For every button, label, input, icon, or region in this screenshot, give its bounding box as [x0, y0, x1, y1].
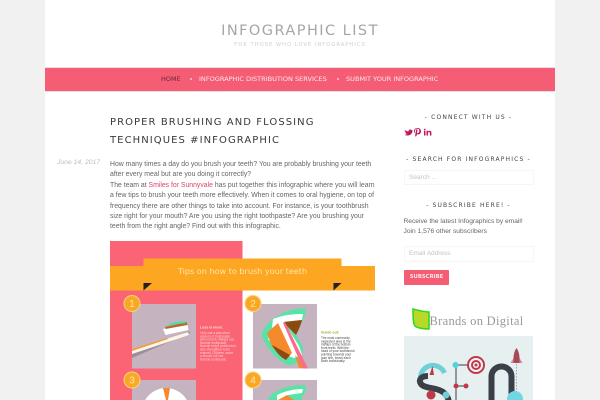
step 1 text: fluoride toothpaste. — [200, 357, 227, 361]
post body text: teeth from the right angle? Find out with this infographic. — [110, 223, 281, 230]
step 1 text: also strengthen tooth — [200, 348, 230, 352]
step 1 text: when brush. Always use — [200, 338, 234, 342]
site title: INFOGRAPHIC LIST — [221, 22, 379, 38]
gauge needle — [430, 366, 434, 375]
rocket — [510, 348, 522, 363]
step 1 image — [132, 304, 196, 368]
navigation bar — [45, 67, 555, 92]
step 4 number badge — [245, 372, 261, 388]
email input: Email Address — [409, 250, 451, 256]
social icons — [404, 128, 432, 137]
ribbon back — [110, 266, 375, 290]
step 1 text: a should not use — [200, 354, 224, 358]
post body text: frequency there are other things to take into account. For instance, is your toothbrush — [110, 203, 369, 210]
step 1 text: fluoride helps protect and — [200, 344, 236, 348]
post title: PROPER BRUSHING AND FLOSSING — [110, 117, 315, 128]
step 2 text: insides of the bottom — [321, 343, 351, 347]
letter S — [420, 376, 449, 400]
gauge — [420, 365, 444, 377]
gear — [426, 390, 436, 400]
post date: June 14, 2017 — [57, 159, 100, 166]
nav: home: HOME — [161, 75, 181, 83]
step 1 text: Less is more: — [200, 326, 223, 330]
step 1 text: enamel. Children under — [200, 351, 234, 355]
post body text — [110, 160, 375, 230]
step 4 number badge: 4 — [250, 376, 256, 386]
step 2 text: neglected area is the — [321, 339, 351, 343]
step 4 image — [253, 380, 317, 400]
subscribe button: SUBSCRIBE — [410, 274, 443, 280]
search input: Search ... — [409, 174, 437, 181]
step 2 text: gum line, brush each — [321, 356, 351, 360]
step 2 text: head of your toothbrush — [321, 349, 355, 353]
sidebar heading: search: - SEARCH FOR INFOGRAPHICS - — [406, 156, 531, 162]
icon: linkedin — [424, 129, 431, 136]
nav: submit: SUBMIT YOUR INFOGRAPHIC — [346, 75, 438, 83]
step 2 number badge: 2 — [250, 299, 256, 310]
sidebar heading: connect: - CONNECT WITH US - — [425, 114, 512, 121]
step 3 number badge: 3 — [129, 376, 135, 386]
ribbon title: Tips on how to brush your teeth — [177, 266, 307, 276]
step 3 image — [132, 380, 196, 400]
small cloud — [442, 392, 450, 398]
post body text: after every meal but are you doing it correctly? — [110, 171, 251, 178]
step 2 text: pointing towards your — [321, 352, 352, 356]
step 1 text: amount of toothpaste — [200, 334, 230, 338]
nav separator dot — [190, 78, 192, 80]
tagline: FOR THOSE WHO LOVE INFOGRAPHICS — [234, 42, 366, 48]
step 2 text: front teeth. With the — [321, 346, 349, 350]
post body text: a few tips to brush your teeth more effectively. When it comes to oral hygiene, on top of — [110, 192, 374, 199]
icon: pinterest — [414, 128, 421, 137]
subscribe text: Join 1,576 other subscribers — [404, 228, 487, 235]
nav: distribution services: INFOGRAPHIC DISTRIBUTION SERVICES — [199, 75, 327, 83]
step 1 text: fluoride toothpaste, — [200, 341, 227, 345]
step 1 number badge: 1 — [129, 299, 135, 310]
brands on digital logo — [412, 308, 523, 330]
pink left panel — [110, 241, 242, 400]
target — [467, 356, 485, 374]
step 2 image — [253, 304, 317, 368]
email input — [404, 246, 534, 262]
post title — [110, 117, 315, 146]
icon: twitter — [404, 130, 413, 136]
ribbon fold shadows — [144, 283, 342, 290]
post body text: size right for your mouth? Are you using the right toothpaste? Are you brushing your — [110, 213, 364, 220]
subscribe text: Receive the latest Infographics by email! — [404, 218, 523, 224]
step 1 text: Only use a pea-sized — [200, 331, 230, 335]
step 2 text: tooth individually. — [321, 359, 345, 363]
icon: green book — [413, 309, 429, 329]
infographic image — [110, 241, 375, 400]
step 3 number badge — [124, 372, 140, 388]
sidebar heading: subscribe: - SUBSCRIBE HERE! - — [426, 202, 511, 208]
post body text: How many times a day do you brush your teeth? You are probably brushing your teeth — [110, 161, 371, 168]
search input — [404, 170, 534, 185]
step 1 number badge — [124, 296, 140, 312]
nav separator dot — [337, 78, 339, 80]
step 1 text — [200, 326, 236, 361]
rocket trail — [516, 364, 518, 392]
step 2 number badge — [245, 296, 261, 312]
post title: TECHNIQUES #INFOGRAPHIC — [110, 135, 280, 146]
subscribe button — [404, 270, 449, 285]
step 2 text: The most commonly — [321, 336, 350, 340]
post body text: The team at Smiles for Sunnyvale has put together this infographic where you will learn — [110, 182, 375, 189]
logo text: Brands on Digital — [430, 314, 523, 328]
connector lines — [456, 365, 470, 400]
step 2 text — [321, 330, 355, 363]
letter O — [492, 366, 512, 400]
SEO illustration — [404, 336, 533, 400]
step 2 text: Inside out: — [321, 330, 339, 334]
subscribe text — [404, 218, 523, 235]
ribbon front — [144, 258, 342, 283]
cloud — [507, 391, 523, 400]
